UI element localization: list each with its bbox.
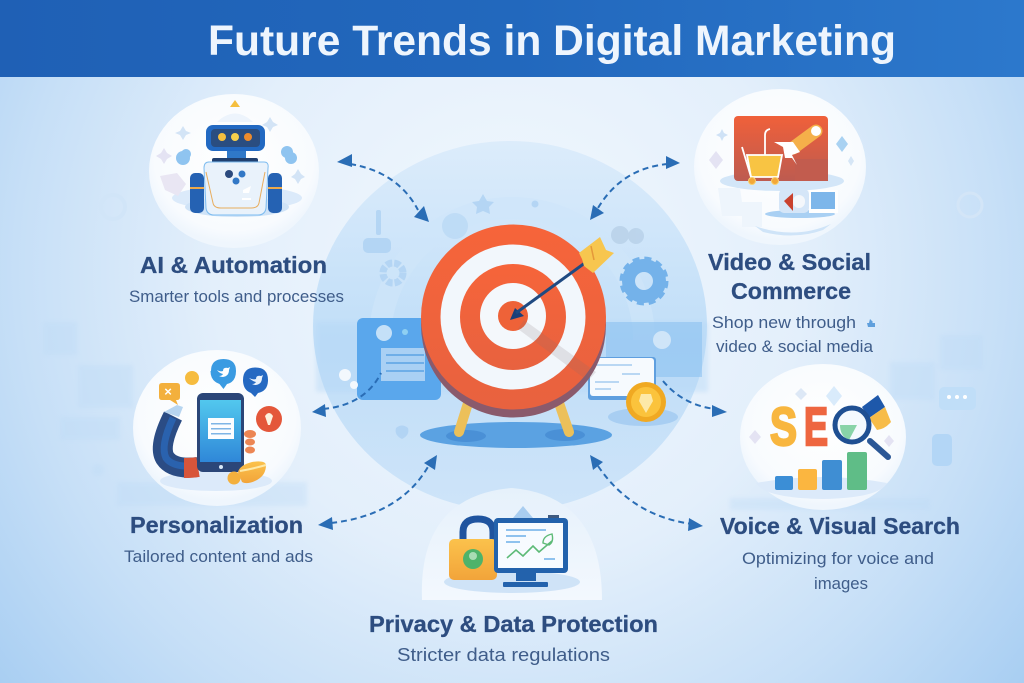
heading: AI & Automation xyxy=(140,252,327,278)
bubble xyxy=(694,89,866,245)
icon: SEO magnifier with bars: E xyxy=(804,397,828,457)
heading: Video & Social xyxy=(708,249,871,275)
icon: SEO magnifier with bars: S xyxy=(770,397,797,457)
panel: AI and Automation xyxy=(129,94,344,306)
description: Optimizing for voice and xyxy=(742,549,934,568)
icon: SEO magnifier with bars xyxy=(749,386,894,499)
arrow: AI to target xyxy=(337,154,429,222)
heading: Privacy & Data Protection xyxy=(369,611,658,637)
bubble xyxy=(149,94,319,248)
heading: Personalization xyxy=(130,512,303,538)
card and coin right of target xyxy=(588,322,702,426)
description: video & social media xyxy=(716,337,874,356)
icon: video screen with cart xyxy=(709,116,854,236)
description: Stricter data regulations xyxy=(397,645,610,665)
target with arrow xyxy=(420,224,614,448)
arrow: target to personalization lower xyxy=(318,455,437,530)
icon: phone with magnet and social bubbles xyxy=(159,359,282,491)
gear icon right of target xyxy=(622,258,666,304)
arrow: target to search xyxy=(663,381,727,417)
arrow: target to voice search lower xyxy=(590,455,703,531)
icon: padlock and monitor xyxy=(444,506,580,593)
arrow: video to target xyxy=(590,156,680,220)
icon: phone with magnet and social bubbles: × xyxy=(164,384,172,399)
central background circle xyxy=(313,141,708,511)
panel: Voice and Visual Search xyxy=(720,364,960,593)
bubble xyxy=(133,350,301,506)
title: Future Trends in Digital Marketing xyxy=(208,17,896,65)
chat box decoration xyxy=(932,387,976,466)
heading xyxy=(708,249,871,304)
description: Shop new through xyxy=(712,313,856,332)
panel: Video and Social Commerce xyxy=(694,89,875,356)
description: images xyxy=(814,574,868,593)
panel: Personalization xyxy=(124,350,313,566)
heading: Voice & Visual Search xyxy=(720,513,960,539)
arrow: personalization to target xyxy=(312,373,381,417)
description: Smarter tools and processes xyxy=(129,287,344,306)
header band xyxy=(0,0,1024,77)
target stand xyxy=(420,400,612,448)
bubble xyxy=(740,364,906,510)
description xyxy=(742,549,934,593)
blue document panel left of target xyxy=(339,318,441,400)
heading: Commerce xyxy=(731,278,851,304)
arrow in bullseye xyxy=(510,237,614,320)
description: Tailored content and ads xyxy=(124,547,313,566)
bubble xyxy=(422,488,602,600)
icon: robot xyxy=(156,100,305,217)
description xyxy=(712,313,875,356)
panel: Privacy and Data Protection xyxy=(369,488,658,665)
target rings xyxy=(421,224,606,418)
